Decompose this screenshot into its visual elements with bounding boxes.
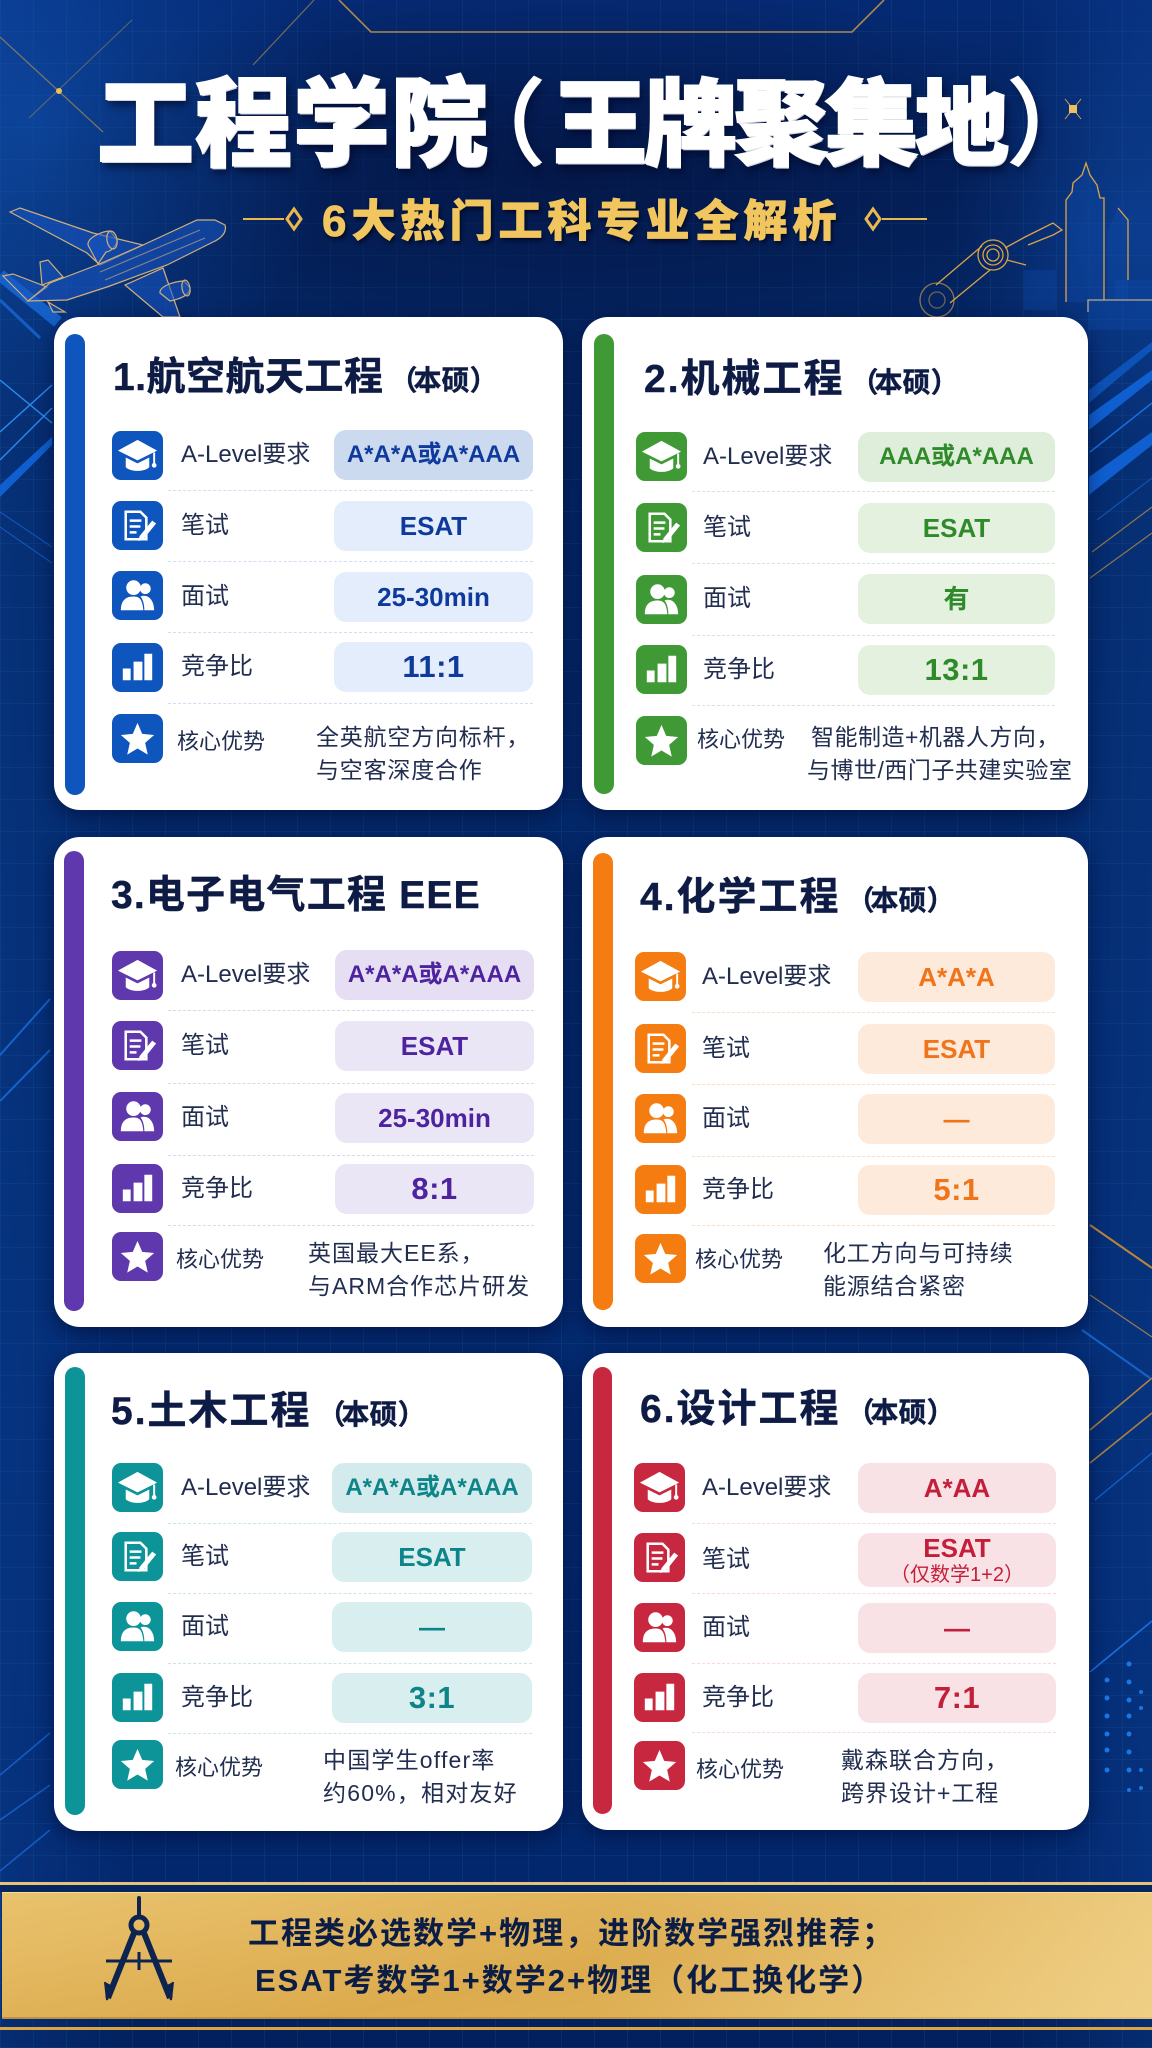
icon: graduation cap — [112, 431, 163, 480]
value: 11:1 — [402, 649, 465, 684]
icon: star — [112, 714, 163, 763]
value — [858, 1533, 1056, 1587]
icon: star — [636, 716, 687, 765]
heading: 5.土木工程（本硕） — [111, 1390, 422, 1433]
title: 王牌聚集地 — [553, 72, 1006, 177]
label: A-Level要求 — [703, 443, 832, 470]
panel: design engineering — [582, 1353, 1089, 1830]
label: 面试 — [181, 1104, 229, 1131]
note text — [248, 1916, 895, 1998]
value: ESAT — [923, 513, 990, 543]
advantage text: 化工方向与可持续 — [823, 1240, 1013, 1266]
value — [332, 1673, 532, 1723]
value — [332, 1463, 532, 1513]
value: ESAT — [400, 511, 467, 541]
value: ESAT — [398, 1542, 466, 1572]
title: 工程学院 — [97, 70, 489, 179]
icon: bars — [112, 643, 163, 692]
icon: people — [636, 575, 687, 624]
value: A*AA — [924, 1473, 990, 1503]
value: 8:1 — [411, 1171, 458, 1206]
label: 核心优势 — [697, 727, 785, 752]
advantage text: 全英航空方向标杆， — [316, 724, 530, 750]
label: 笔试 — [702, 1035, 750, 1062]
value — [335, 1093, 534, 1143]
text: ） — [1008, 74, 1100, 176]
icon: document — [112, 1021, 163, 1070]
value: — — [419, 1612, 445, 1642]
advantage text — [807, 724, 1072, 783]
label: 笔试 — [703, 514, 751, 541]
value: 25-30min — [377, 582, 490, 612]
label: 面试 — [702, 1105, 750, 1132]
label: 竞争比 — [703, 656, 775, 683]
title — [97, 70, 1100, 179]
label: 笔试 — [702, 1546, 750, 1573]
label: 核心优势 — [177, 729, 265, 754]
value: 25-30min — [378, 1103, 491, 1133]
advantage text — [823, 1240, 1013, 1299]
value: A*A*A — [918, 962, 995, 992]
advantage text: 与ARM合作芯片研发 — [308, 1273, 530, 1299]
advantage text — [316, 724, 530, 783]
value — [858, 952, 1055, 1002]
value: A*A*A或A*AAA — [348, 961, 521, 988]
icon: star — [634, 1741, 685, 1790]
advantage text: 与空客深度合作 — [316, 757, 483, 783]
value: — — [944, 1613, 970, 1643]
heading: 2.机械工程（本硕） — [644, 358, 955, 401]
icon: people — [112, 571, 163, 620]
label: A-Level要求 — [702, 1474, 831, 1501]
value: ESAT — [923, 1533, 991, 1563]
advantage text — [841, 1747, 1009, 1806]
value — [858, 1463, 1056, 1513]
icon: star — [112, 1232, 163, 1281]
advantage text: 跨界设计+工程 — [841, 1780, 999, 1806]
value: A*A*A或A*AAA — [347, 441, 520, 468]
value: （仅数学1+2） — [890, 1564, 1024, 1586]
label: A-Level要求 — [181, 441, 310, 468]
value: AAA或A*AAA — [879, 443, 1034, 470]
heading: 3.电子电气工程 EEE — [111, 874, 481, 917]
value — [334, 572, 533, 622]
advantage text: 能源结合紧密 — [823, 1273, 966, 1299]
value: 有 — [943, 584, 970, 614]
label: 竞争比 — [181, 653, 253, 680]
icon: document — [635, 1024, 686, 1073]
advantage text: 与博世/西门子共建实验室 — [807, 757, 1072, 783]
advantage text — [308, 1240, 530, 1299]
advantage text: 智能制造+机器人方向， — [811, 724, 1060, 750]
value — [858, 432, 1055, 482]
title: （ — [452, 74, 544, 176]
label: 面试 — [703, 585, 751, 612]
value: 3:1 — [409, 1680, 455, 1715]
value — [858, 1094, 1055, 1144]
value — [858, 1673, 1056, 1723]
value: 5:1 — [933, 1172, 980, 1207]
value: 7:1 — [934, 1680, 980, 1715]
value: — — [944, 1104, 970, 1134]
panel: civil engineering — [54, 1353, 563, 1831]
icon: document — [112, 1532, 163, 1581]
icon: graduation cap — [636, 432, 687, 481]
value — [858, 645, 1055, 695]
label: 核心优势 — [175, 1755, 263, 1780]
heading: 4.化学工程（本硕） — [640, 876, 951, 919]
panel: mechanical engineering — [582, 317, 1088, 810]
label: 面试 — [181, 1613, 229, 1640]
icon: bars — [634, 1673, 685, 1722]
value — [858, 503, 1055, 553]
label: A-Level要求 — [181, 1474, 310, 1501]
subtitle text: 6大热门工科专业全解析 — [322, 197, 841, 246]
label: A-Level要求 — [181, 961, 310, 988]
value — [858, 1603, 1056, 1653]
value: ESAT — [923, 1034, 990, 1064]
icon: people — [112, 1092, 163, 1141]
icon: people — [634, 1603, 685, 1652]
icon: bars — [112, 1164, 163, 1213]
value — [858, 1024, 1055, 1074]
advantage text: 中国学生offer率 — [323, 1747, 496, 1773]
label: 笔试 — [181, 1543, 229, 1570]
label: 核心优势 — [695, 1247, 783, 1272]
value: ESAT — [401, 1031, 468, 1061]
value — [335, 1021, 534, 1071]
footer banner — [0, 1882, 1152, 2030]
icon: drafting compass — [104, 1896, 174, 2000]
icon: people — [635, 1094, 686, 1143]
icon: graduation cap — [635, 952, 686, 1001]
value — [334, 430, 533, 480]
advantage text: 戴森联合方向， — [841, 1747, 1009, 1773]
icon: graduation cap — [634, 1463, 685, 1512]
panel: aerospace engineering — [54, 317, 563, 810]
icon: document — [636, 503, 687, 552]
value — [332, 1532, 532, 1582]
icon: bars — [635, 1165, 686, 1214]
icon: star — [635, 1234, 686, 1283]
icon: graduation cap — [112, 951, 163, 1000]
label: 面试 — [181, 583, 229, 610]
icon: star — [112, 1740, 163, 1789]
advantage text — [323, 1747, 518, 1806]
value — [335, 1164, 534, 1214]
label: 竞争比 — [181, 1175, 253, 1202]
value — [858, 574, 1055, 624]
value — [335, 950, 534, 1000]
label: 笔试 — [181, 1032, 229, 1059]
icon: bars — [112, 1673, 163, 1722]
icon: robot arm and skyline — [919, 161, 1152, 330]
subtitle — [243, 197, 927, 246]
label: 笔试 — [181, 512, 229, 539]
panel: chemical engineering — [582, 837, 1088, 1327]
label: 竞争比 — [702, 1684, 774, 1711]
value — [334, 642, 533, 692]
label: 竞争比 — [702, 1176, 774, 1203]
note text: ESAT考数学1+数学2+物理（化工换化学） — [255, 1963, 884, 1998]
label: 面试 — [702, 1614, 750, 1641]
icon: graduation cap — [112, 1463, 163, 1512]
heading: 1.航空航天工程（本硕） — [113, 356, 494, 399]
panel: electronic and electrical engineering — [54, 837, 563, 1327]
label: 核心优势 — [696, 1757, 784, 1782]
heading: 6.设计工程（本硕） — [640, 1388, 951, 1431]
note text: 工程类必选数学+物理，进阶数学强烈推荐； — [248, 1916, 895, 1951]
value — [858, 1165, 1055, 1215]
icon: document — [634, 1533, 685, 1582]
advantage text: 英国最大EE系， — [308, 1240, 485, 1266]
label: 核心优势 — [176, 1247, 264, 1272]
label: 竞争比 — [181, 1684, 253, 1711]
label: A-Level要求 — [702, 963, 831, 990]
icon: bars — [636, 645, 687, 694]
icon: people — [112, 1602, 163, 1651]
value — [334, 501, 533, 551]
value — [332, 1602, 532, 1652]
icon: airplane line art — [2, 207, 226, 317]
icon: document — [112, 501, 163, 550]
value: 13:1 — [924, 652, 989, 687]
value: A*A*A或A*AAA — [345, 1474, 519, 1501]
advantage text: 约60%，相对友好 — [323, 1780, 518, 1806]
